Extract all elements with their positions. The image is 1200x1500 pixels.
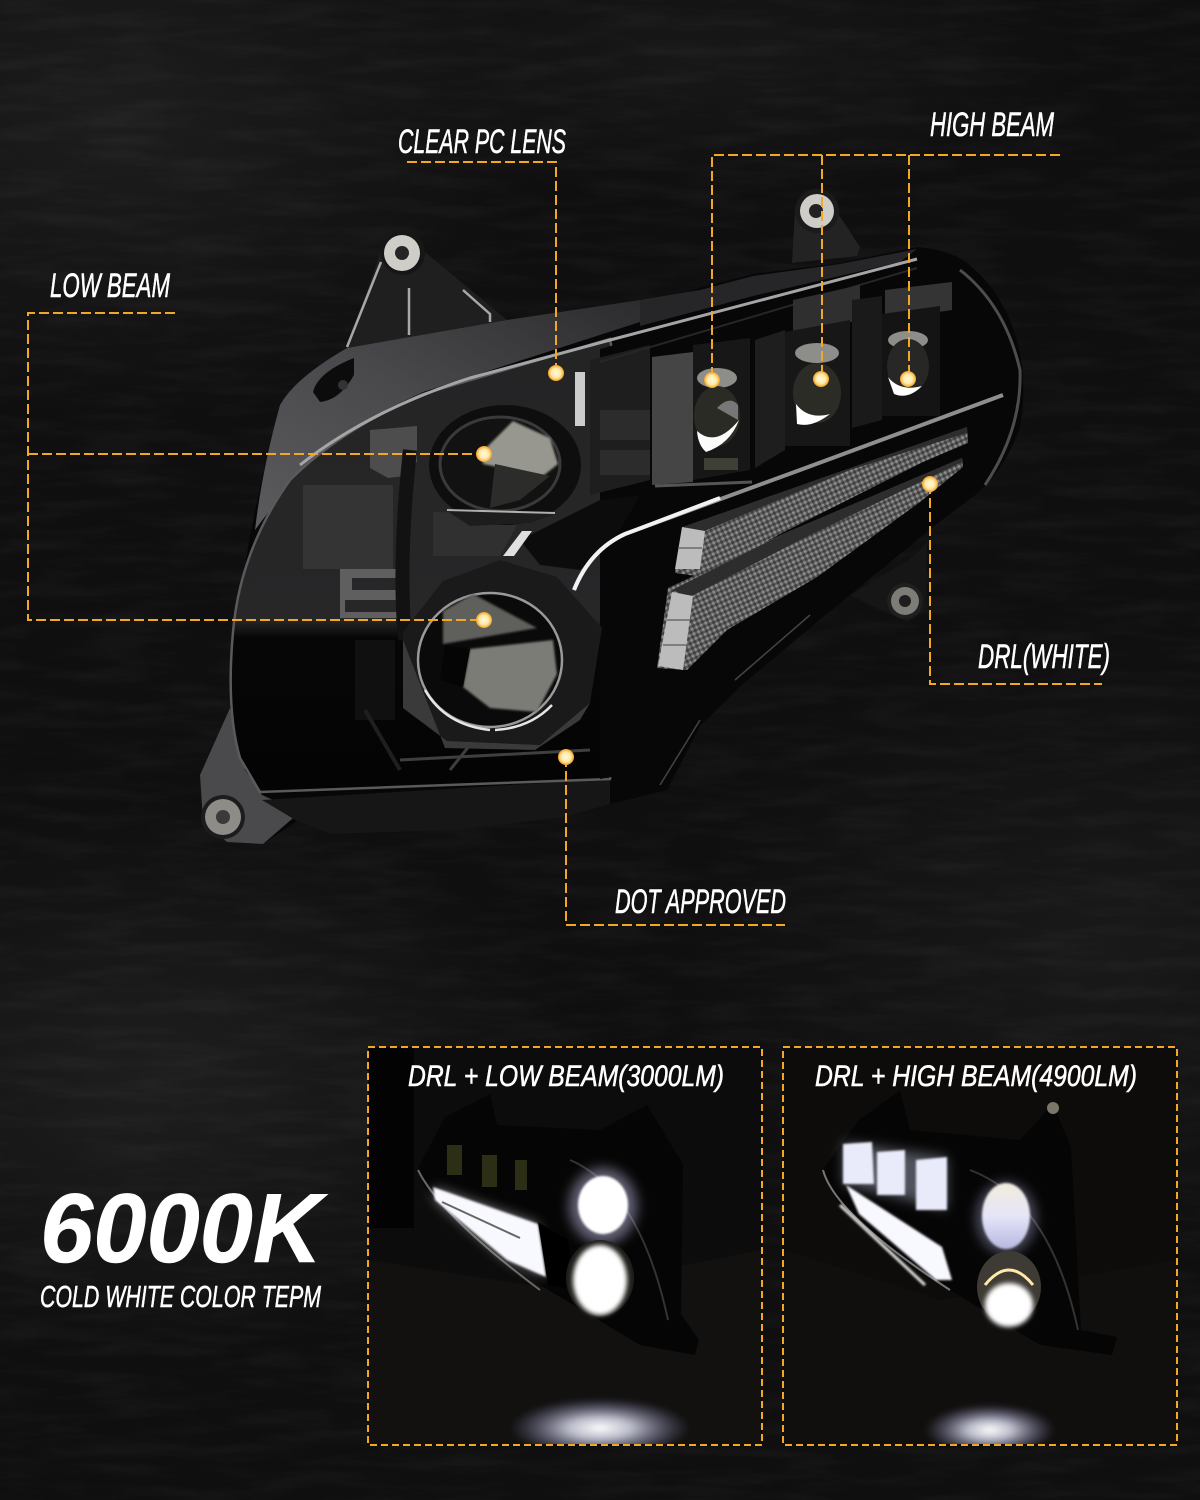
callout: clear PC lens: [398, 123, 566, 381]
panel: DRL + low beam: [368, 1047, 762, 1458]
panel: DRL + high beam: [783, 1047, 1177, 1456]
high beam projector modules: [652, 282, 952, 485]
panel: DRL + high beam: DRL + HIGH BEAM(4900LM): [815, 1060, 1137, 1093]
grey upper bezel band: [255, 300, 640, 530]
DRL light strips: [657, 427, 968, 670]
lens interior left (smoked): [231, 339, 640, 792]
callout: low beam: LOW BEAM: [50, 267, 170, 305]
callout: DOT approved: DOT APPROVED: [615, 883, 786, 921]
colour temperature heading: 6000K: [40, 1173, 328, 1283]
callout: clear PC lens: CLEAR PC LENS: [398, 123, 566, 161]
callout: high beam: [704, 106, 1060, 388]
lit headlight photo: [822, 1090, 1116, 1444]
colour temperature heading: COLD WHITE COLOR TEPM: [40, 1279, 321, 1314]
callout: low beam: [28, 267, 492, 628]
bottom-left mount: [200, 708, 300, 844]
callout: DRL white: DRL(WHITE): [978, 638, 1110, 676]
upper low beam projector: [429, 405, 581, 526]
chrome strips: [300, 259, 1003, 590]
interior reflector parts: [303, 345, 650, 770]
panel: DRL + low beam: DRL + LOW BEAM(3000LM): [408, 1060, 724, 1093]
lens interior right: [600, 261, 1018, 779]
mounting brackets and bolts: [347, 189, 927, 622]
callout: high beam: HIGH BEAM: [930, 106, 1054, 144]
outer housing silhouette: [200, 247, 1023, 844]
callout: DOT approved: [558, 749, 786, 925]
lower low beam projector: [403, 560, 602, 750]
lit headlight photo: [369, 1048, 698, 1444]
headlight product image: [200, 189, 1023, 844]
callout: DRL white: [922, 476, 1110, 684]
